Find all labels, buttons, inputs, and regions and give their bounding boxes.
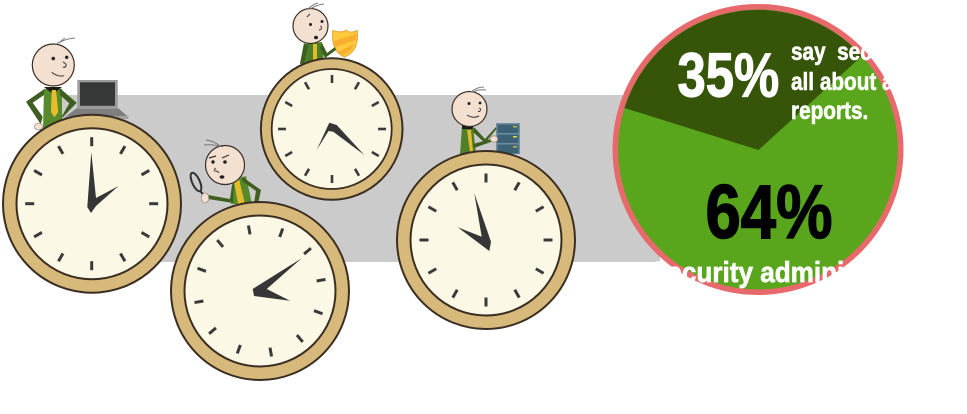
text: 35% caption (791, 37, 940, 124)
character: man with server (452, 87, 498, 154)
text: 35% caption: say security is (791, 37, 940, 65)
statistic: 64%: 64% (706, 170, 832, 254)
clock: laptop man (3, 115, 181, 293)
text: 35% caption: all about audit (791, 67, 932, 95)
clock: server man (397, 151, 575, 329)
pie chart: 35% vs 64% (615, 7, 901, 292)
character: man with magnifying glass (188, 140, 261, 204)
character: man with shield (293, 3, 336, 64)
character: man with laptop (26, 38, 77, 130)
clock: magnifying glass man (171, 202, 349, 380)
icon: laptop (65, 80, 128, 119)
text: 64% caption: Security administrators (650, 256, 941, 288)
text: 35% caption: reports. (791, 96, 868, 124)
icon: shield (333, 30, 358, 57)
icon: server rack (496, 123, 520, 154)
clock: shield man (261, 58, 403, 200)
statistic: 35%: 35% (678, 42, 779, 111)
grey background band (60, 95, 660, 262)
